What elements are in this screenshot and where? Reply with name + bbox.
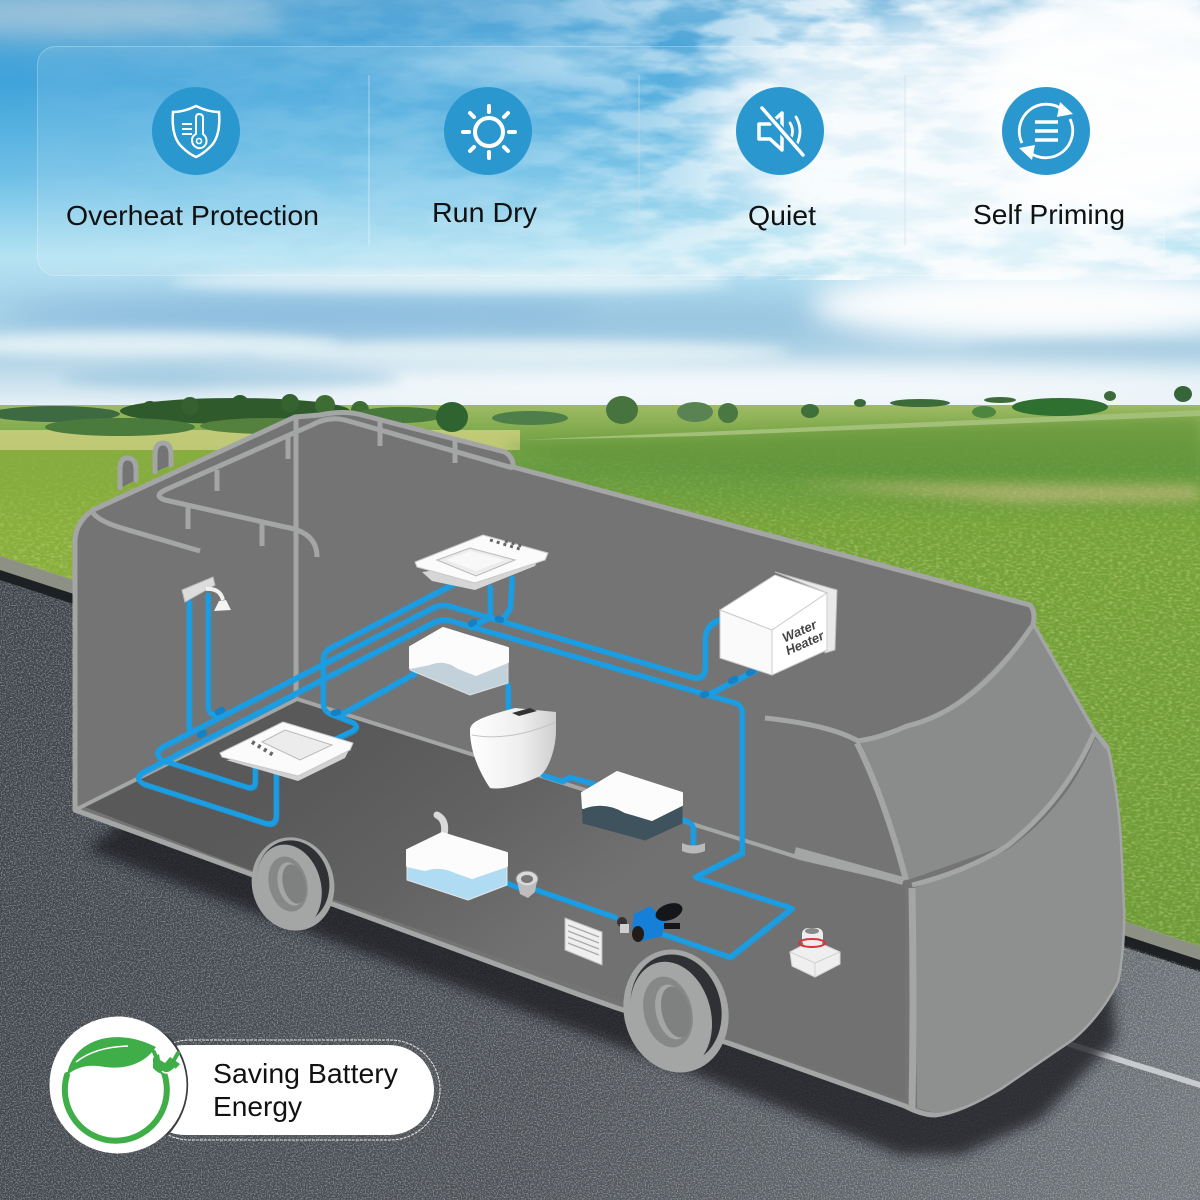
label: Run Dry [432, 197, 537, 228]
pipe shadow edge [139, 579, 793, 958]
icon: shower fixture [182, 577, 231, 611]
icon: green leaf and plug [65, 1037, 180, 1141]
background: horizon trees [0, 386, 1192, 436]
badge text [213, 1058, 398, 1122]
icon: drain trap [682, 843, 705, 854]
windshield panel [860, 625, 1093, 880]
cabin floor [82, 700, 905, 1100]
pipe couplings [200, 619, 753, 735]
cab front panel [914, 738, 1123, 1113]
badge text: Energy [213, 1091, 302, 1122]
icon: shield thermometer [152, 87, 240, 175]
background: road with curb and lane line [0, 556, 1200, 1200]
RV body cutaway [75, 412, 1123, 1115]
icon: battery switch [790, 928, 840, 977]
icon: black water tank [582, 772, 682, 840]
structural frame lines [75, 417, 1094, 1110]
panel: feature strip [38, 46, 1164, 276]
icon: vent grille [565, 918, 602, 965]
icon: fresh water tank [407, 815, 507, 900]
feature: run dry [432, 87, 537, 228]
icon: toilet [470, 708, 556, 789]
RV body silhouette [75, 412, 1123, 1115]
feature: overheat protection [66, 87, 319, 231]
icon: water pump [617, 900, 685, 942]
badge: saving battery energy [50, 1016, 440, 1154]
badge text: Saving Battery [213, 1058, 398, 1089]
roof bumps [120, 443, 171, 488]
icon: inline strainer filter [516, 871, 538, 898]
icon: water heater [720, 572, 837, 675]
rear wheel [242, 828, 344, 940]
icon: lower sink [220, 722, 353, 781]
water heater label: Water [780, 617, 820, 645]
badge pill [50, 1016, 440, 1154]
icon: cycle arrows with list [1002, 87, 1090, 175]
label: Self Priming [973, 199, 1125, 230]
front wheel [611, 938, 741, 1084]
background: green fields [0, 405, 1200, 950]
icon: muted speaker [736, 87, 824, 175]
icon: upper sink [415, 535, 548, 590]
icon: grey water tank [410, 628, 508, 695]
icon: sun [444, 87, 532, 175]
background: sky with clouds [0, 0, 1200, 415]
water heater label [778, 616, 827, 658]
feature: quiet [736, 87, 824, 231]
plumbing pipes [138, 578, 793, 958]
pipe network [138, 578, 792, 957]
feature: self priming [973, 87, 1125, 230]
label: Overheat Protection [66, 200, 319, 231]
label: Quiet [748, 200, 816, 231]
water heater label: Heater [783, 627, 827, 658]
